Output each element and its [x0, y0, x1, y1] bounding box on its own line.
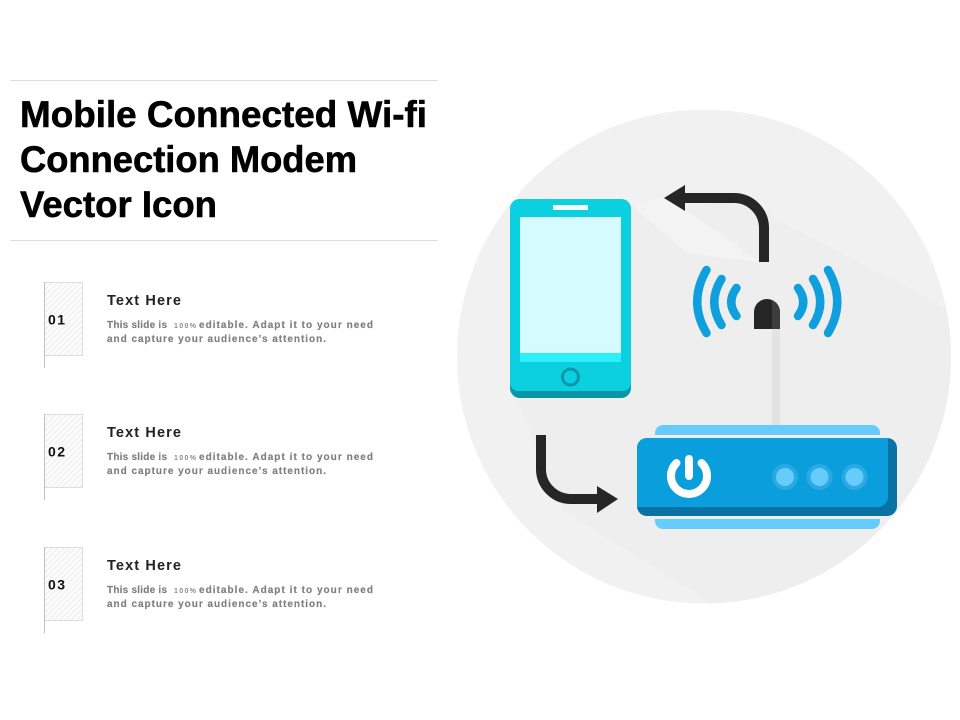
background circle with long shadows	[450, 100, 960, 610]
text block 03: Text Here	[107, 558, 181, 574]
icon: wifi signal	[697, 270, 837, 333]
icon: antenna	[754, 299, 780, 426]
arrow: router to phone	[664, 185, 764, 262]
status lights	[772, 464, 868, 490]
text block 01	[107, 293, 373, 345]
number box 01: 01	[48, 312, 67, 328]
list item 02	[44, 414, 373, 500]
text block 03: 100%	[174, 588, 197, 595]
text block 01: and capture your audience’s attention.	[107, 334, 326, 345]
text block 02: and capture your audience’s attention.	[107, 466, 326, 477]
number box 01	[44, 282, 82, 368]
text block 03: editable. Adapt it to your need	[199, 585, 373, 596]
list item 03	[44, 547, 373, 633]
arrow: phone to router	[541, 435, 618, 513]
icon: power button	[671, 459, 707, 494]
text block 02: Text Here	[107, 425, 181, 441]
text block 03: and capture your audience’s attention.	[107, 599, 326, 610]
text block 01: 100%	[174, 323, 197, 330]
text block 01: editable. Adapt it to your need	[199, 320, 373, 331]
text block 01: Text Here	[107, 293, 181, 309]
text block 02	[107, 425, 373, 477]
text block 03	[107, 558, 373, 610]
text block 03: This slide is	[107, 585, 167, 596]
list item 01	[44, 282, 373, 368]
number box 03: 03	[48, 576, 67, 592]
number box 02: 02	[48, 444, 67, 460]
text block 01: This slide is	[107, 320, 167, 331]
text block 02: editable. Adapt it to your need	[199, 452, 373, 463]
title: Connection Modem	[20, 139, 357, 180]
icon: smartphone	[510, 199, 631, 398]
number box 02	[44, 414, 82, 500]
number box 03	[44, 547, 82, 633]
title: Vector Icon	[20, 184, 217, 225]
title	[20, 94, 427, 225]
text block 02: This slide is	[107, 452, 167, 463]
title: Mobile Connected Wi-fi	[20, 94, 427, 135]
text block 02: 100%	[174, 455, 197, 462]
icon: modem	[637, 425, 897, 529]
